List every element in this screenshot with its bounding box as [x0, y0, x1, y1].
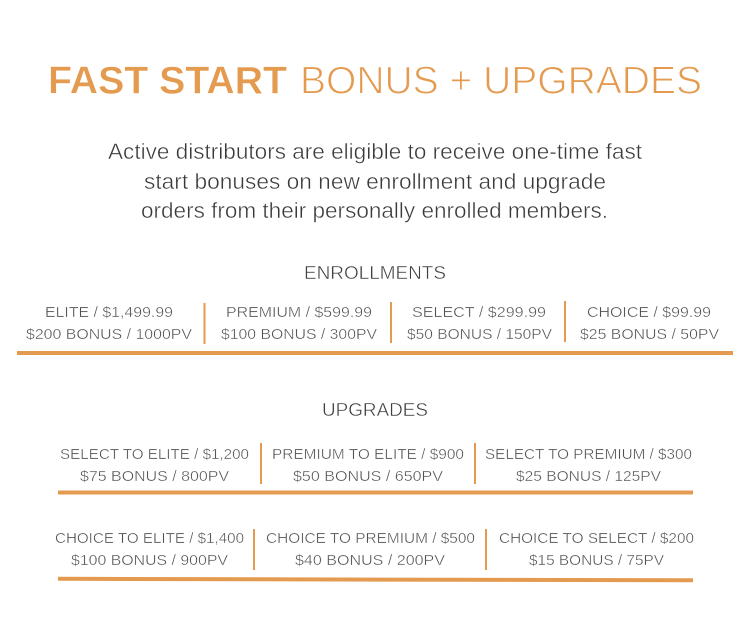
upgrade: select to elite: $75 BONUS / 800PV: [80, 469, 229, 485]
panel: upgrades row 1: [58, 443, 693, 494]
upgrade: choice to select: CHOICE TO SELECT / $200: [499, 531, 694, 547]
enrollment: premium: [221, 305, 377, 343]
panel: enrollments: [17, 301, 733, 355]
upgrade: select to premium: $25 BONUS / 125PV: [516, 469, 661, 485]
upgrade: select to premium: [485, 447, 692, 485]
intro text: orders from their personally enrolled members.: [141, 198, 608, 223]
enrollment: elite: [26, 305, 192, 343]
title: BONUS + UPGRADES: [300, 60, 702, 102]
title: FAST START: [48, 60, 287, 102]
upgrade: premium to elite: $50 BONUS / 650PV: [293, 469, 443, 485]
upgrade: choice to select: [499, 531, 694, 569]
upgrade: select to elite: [60, 447, 249, 485]
upgrade: choice to premium: [266, 531, 475, 569]
enrollment: select: SELECT / $299.99: [412, 305, 546, 321]
upgrade: select to premium: SELECT TO PREMIUM / $300: [485, 447, 692, 463]
upgrade: select to elite: SELECT TO ELITE / $1,200: [60, 447, 249, 463]
enrollment: select: $50 BONUS / 150PV: [407, 327, 552, 343]
intro text: start bonuses on new enrollment and upgrade: [144, 169, 606, 194]
intro text: Active distributors are eligible to receive one-time fast: [108, 139, 643, 164]
enrollment: choice: [580, 305, 719, 343]
enrollment: premium: $100 BONUS / 300PV: [221, 327, 377, 343]
enrollment: select: [407, 305, 552, 343]
enrollment: premium: PREMIUM / $599.99: [226, 305, 372, 321]
heading: upgrades: UPGRADES: [322, 400, 428, 420]
enrollment: choice: $25 BONUS / 50PV: [580, 327, 719, 343]
upgrade: choice to elite: $100 BONUS / 900PV: [71, 553, 228, 569]
enrollment: elite: $200 BONUS / 1000PV: [26, 327, 192, 343]
upgrade: choice to elite: CHOICE TO ELITE / $1,400: [55, 531, 244, 547]
upgrade: choice to select: $15 BONUS / 75PV: [529, 553, 664, 569]
title: [48, 60, 702, 102]
upgrade: choice to premium: $40 BONUS / 200PV: [295, 553, 445, 569]
upgrade: premium to elite: [272, 447, 464, 485]
upgrade: choice to elite: [55, 531, 244, 569]
heading: enrollments: ENROLLMENTS: [304, 263, 446, 283]
enrollment: elite: ELITE / $1,499.99: [45, 305, 173, 321]
intro text: [108, 139, 643, 223]
upgrade: premium to elite: PREMIUM TO ELITE / $900: [272, 447, 464, 463]
enrollment: choice: CHOICE / $99.99: [587, 305, 711, 321]
panel: upgrades row 2: [55, 529, 694, 582]
upgrade: choice to premium: CHOICE TO PREMIUM / $500: [266, 531, 475, 547]
